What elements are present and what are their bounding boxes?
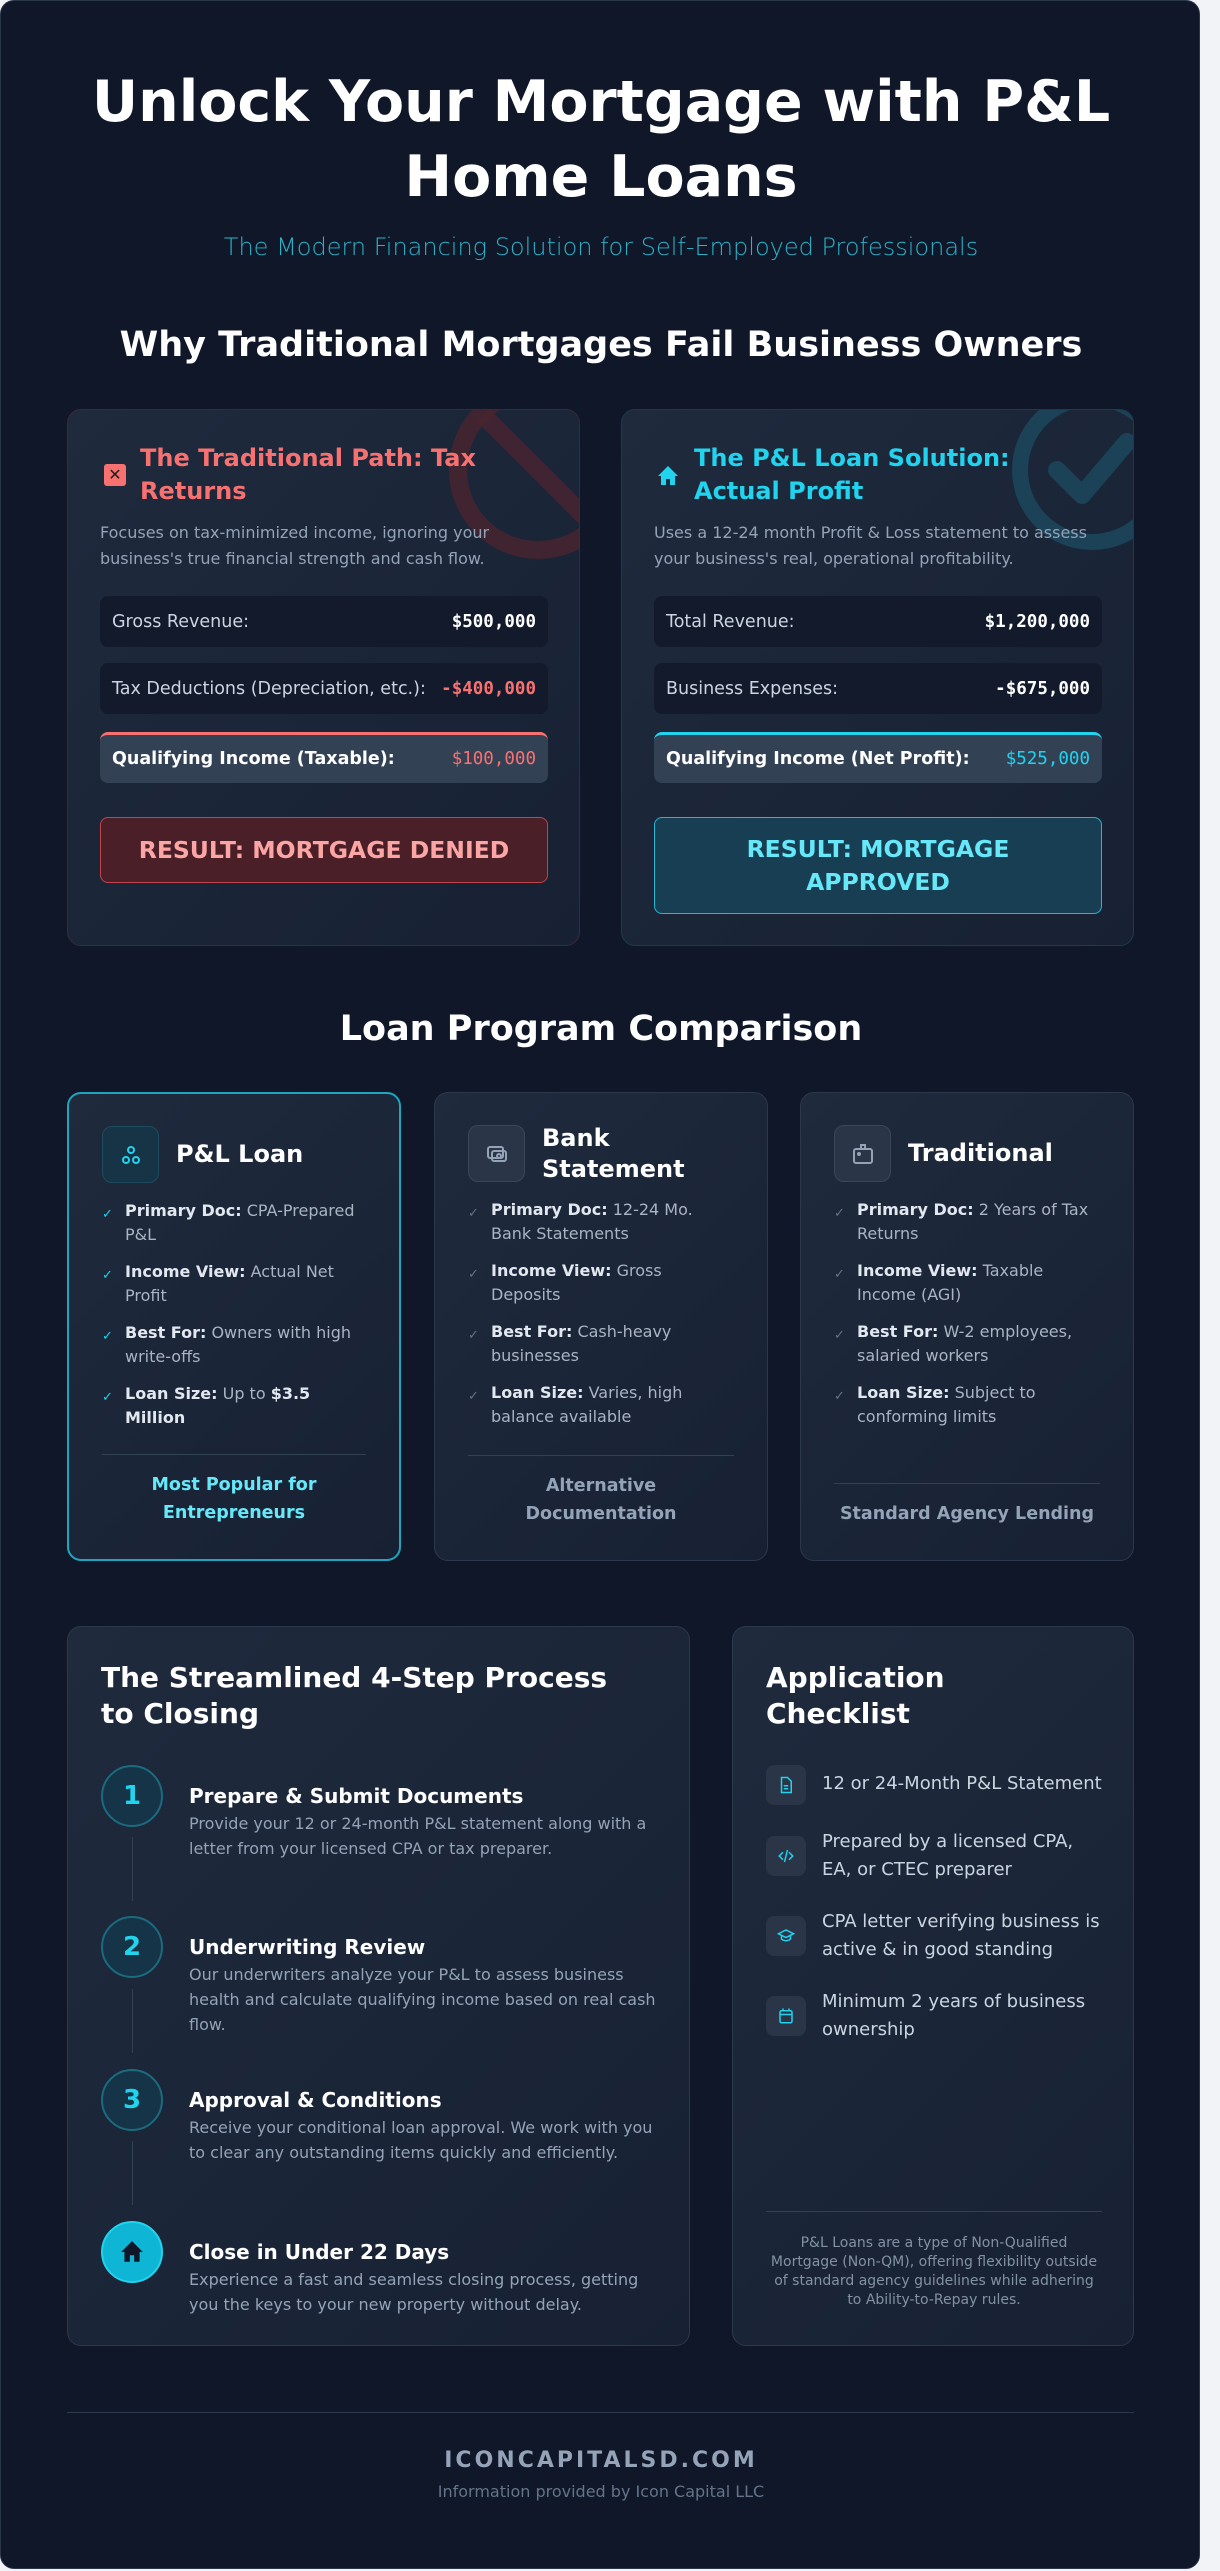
panel: 4-step process [67,1626,690,2346]
icon: x box [104,464,126,486]
row: tax deductions [100,663,548,714]
features: Income View: Taxable Income (AGI) [857,1261,1043,1304]
features: Primary Doc: CPA-Prepared P&L [125,1201,354,1244]
row: business expenses [654,663,1102,714]
title [92,69,1110,210]
row: tax deductions: Tax Deductions (Depreciation, etc.): [112,678,426,698]
icon: decorative no sign [449,410,579,559]
panel: traditional [800,1092,1134,1561]
features: Income View: Gross Deposits [491,1261,662,1304]
row: gross revenue [100,596,548,647]
row: qualifying income: Qualifying Income (Taxable): [112,749,395,769]
icon: decorative check circle [1012,410,1133,550]
heading: why traditional fails: Why Traditional Mortgages Fail Business Owners [120,325,1082,365]
row: qualifying income [100,732,548,783]
card title: The Traditional Path: Tax [140,444,476,472]
row: qualifying income: Qualifying Income (Net Profit): [666,749,970,769]
row: qualifying income [654,732,1102,783]
heading: loan comparison: Loan Program Comparison [340,1009,862,1049]
panel: 4-step process: Experience a fast and seamless closing process, getting you the keys to your new property without delay. [189,2270,638,2314]
heading [101,1661,607,1730]
row: gross revenue: Gross Revenue: [112,612,249,632]
result denied: RESULT: MORTGAGE DENIED [139,836,509,864]
panel: P&L loan [67,1092,401,1561]
description: Uses a 12-24 month Profit & Loss statement to assess your business's real, operational profitability. [654,523,1087,568]
row: tax deductions: -$400,000 [441,678,536,698]
row: qualifying income: $100,000 [452,749,536,769]
footer brand: ICONCAPITALSD.COM [444,2448,758,2473]
heading [766,1661,945,1730]
description: Focuses on tax-minimized income, ignoring your business's true financial strength and cash flow. [100,523,489,568]
note: P&L Loans are a type of Non-Qualified Mortgage (Non-QM), offering flexibility outside of standard agency guidelines while adhering to Ability-to-Repay rules. [771,2235,1097,2308]
footer tag: Most Popular for [152,1475,316,1495]
subtitle: The Modern Financing Solution for Self-Employed Professionals [224,233,978,261]
features [104,1201,354,1427]
header: Bank [542,1124,610,1152]
heading: Checklist [766,1697,910,1730]
header: Statement [542,1154,685,1182]
panel: P&L solution [621,409,1134,946]
panel: bank statement [434,1092,768,1561]
card title: The P&L Loan Solution: [694,444,1010,472]
row: business expenses: Business Expenses: [666,678,838,698]
features: Best For: W-2 employees, salaried workers [857,1322,1072,1365]
step 1: 1 [123,1781,141,1811]
footer tag [834,1483,1100,1528]
step 2: 2 [123,1932,141,1962]
title: Home Loans [404,144,798,210]
footer tag: Entrepreneurs [163,1503,305,1523]
step 4 [101,2221,638,2314]
row: gross revenue: $500,000 [452,612,536,632]
step 3: Approval & Conditions [189,2088,442,2112]
panel: traditional path [67,409,580,946]
features: Primary Doc: 12-24 Mo. Bank Statements [491,1200,693,1243]
result denied [100,817,548,883]
step 4: Close in Under 22 Days [189,2240,449,2264]
footer tag: Documentation [526,1504,676,1524]
features: Loan Size: Varies, high balance available [491,1383,682,1426]
title: Unlock Your Mortgage with P&L [92,69,1110,135]
features: Loan Size: Subject to conforming limits [857,1383,1036,1426]
header: P&L Loan [176,1140,303,1168]
features: Income View: Actual Net Profit [125,1262,334,1305]
heading: Application [766,1661,945,1694]
result approved [654,817,1102,914]
heading: The Streamlined 4-Step Process [101,1661,607,1694]
footer tag [468,1455,734,1528]
features [470,1200,693,1426]
row: total revenue: Total Revenue: [666,612,795,632]
row: qualifying income: $525,000 [1006,749,1090,769]
features: Best For: Owners with high write-offs [125,1323,351,1366]
item 2: Prepared by a licensed CPA, EA, or CTEC preparer [822,1831,1073,1880]
card title [694,444,1010,505]
step 2 [101,1916,656,2034]
card title [140,444,476,505]
step 1 [101,1765,646,1858]
footer tag: Alternative [546,1476,656,1496]
result approved: APPROVED [806,868,950,896]
item 4: Minimum 2 years of business ownership [822,1991,1085,2040]
item 1: 12 or 24-Month P&L Statement [822,1773,1102,1794]
footer tag [102,1454,366,1527]
result approved: RESULT: MORTGAGE [747,834,1009,862]
step 3 [101,2069,652,2162]
header [834,1125,1053,1182]
header [102,1126,303,1183]
panel: 4-step process: Our underwriters analyze your P&L to assess business health and calculate qualifying income based on real cash flow. [189,1965,656,2034]
footer tag: Standard Agency Lending [840,1504,1094,1524]
icon: house [658,466,678,485]
features: Primary Doc: 2 Years of Tax Returns [857,1200,1088,1243]
row: total revenue [654,596,1102,647]
features: Best For: Cash-heavy businesses [491,1322,671,1365]
header: Traditional [908,1139,1053,1167]
panel: 4-step process: Provide your 12 or 24-month P&L statement along with a letter from your licensed CPA or tax preparer. [189,1814,646,1858]
step 3: 3 [123,2085,141,2115]
panel: 4-step process: Receive your conditional loan approval. We work with you to clear any outstanding items quickly and efficiently. [189,2118,652,2162]
heading: to Closing [101,1697,259,1730]
row: business expenses: -$675,000 [995,678,1090,698]
step 2: Underwriting Review [189,1935,425,1959]
item 1 [766,1765,1102,1805]
features [836,1200,1088,1426]
card title: Returns [140,477,247,505]
footer credit: Information provided by Icon Capital LLC [438,2482,764,2501]
card title: Actual Profit [694,477,863,505]
step 1: Prepare & Submit Documents [189,1784,523,1808]
icon: x box: ✕ [108,465,122,484]
row: total revenue: $1,200,000 [985,612,1090,632]
header [468,1124,685,1182]
panel: application checklist [732,1626,1134,2346]
features: Loan Size: Up to $3.5 Million [125,1384,310,1427]
item 3: CPA letter verifying business is active & in good standing [822,1911,1100,1960]
